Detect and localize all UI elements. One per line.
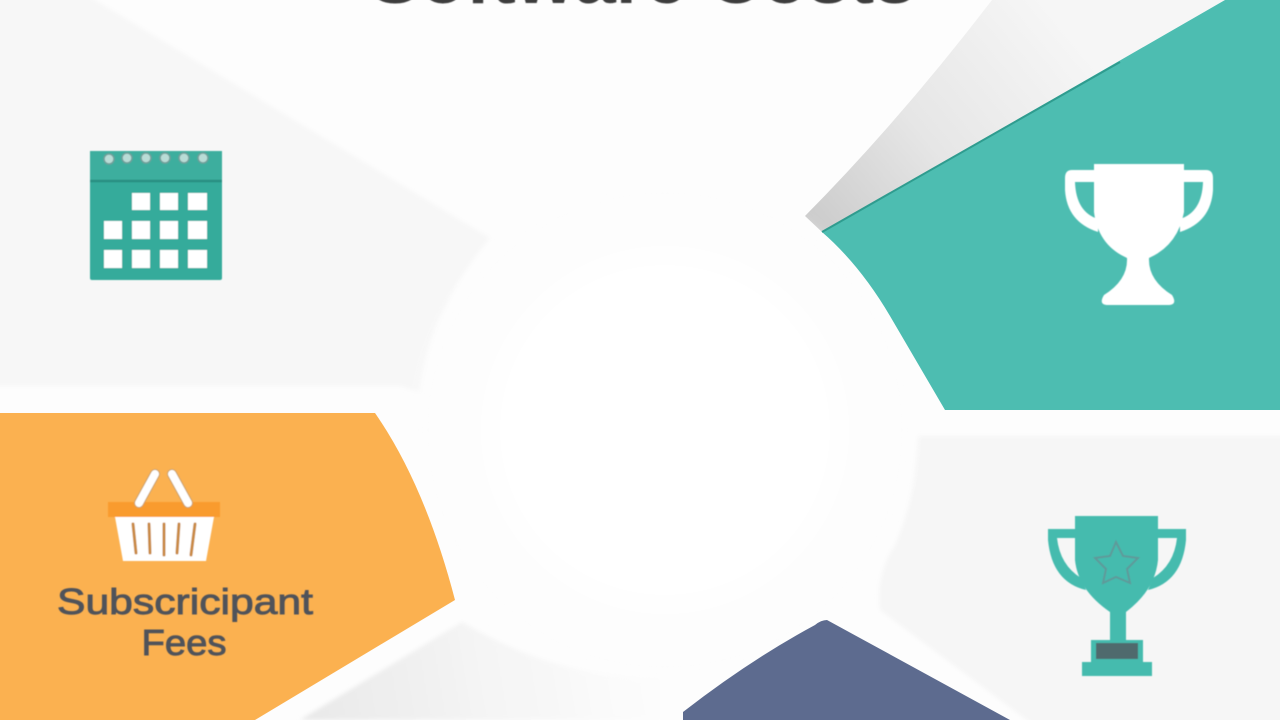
shadow wedge beside teal segment bbox=[805, 0, 1225, 232]
inner centre circle bbox=[490, 255, 840, 605]
panel: lower-right grey segment bbox=[879, 436, 1280, 720]
icon: white trophy bbox=[1065, 164, 1213, 305]
label: Subscricipant Fees bbox=[57, 581, 313, 663]
icon: calendar bbox=[90, 151, 222, 280]
icon: shopping basket bbox=[108, 474, 220, 561]
panel: orange segment bbox=[0, 413, 455, 720]
trophy star bbox=[1095, 542, 1138, 583]
panel: navy segment bbox=[683, 620, 1010, 720]
label: Subscricipant Fees: Fees bbox=[142, 622, 226, 663]
panel: top-left grey segment bbox=[0, 0, 490, 392]
icon: teal trophy with star bbox=[1048, 516, 1186, 676]
trophy plaque bbox=[1096, 643, 1138, 659]
panel: teal segment bbox=[822, 0, 1280, 410]
panel: centre circle bbox=[420, 185, 910, 675]
panel: bottom-left grey segment bbox=[300, 622, 660, 720]
label: Subscricipant Fees: Subscricipant bbox=[57, 581, 313, 622]
teal segment dark top edge bbox=[822, 62, 1120, 232]
